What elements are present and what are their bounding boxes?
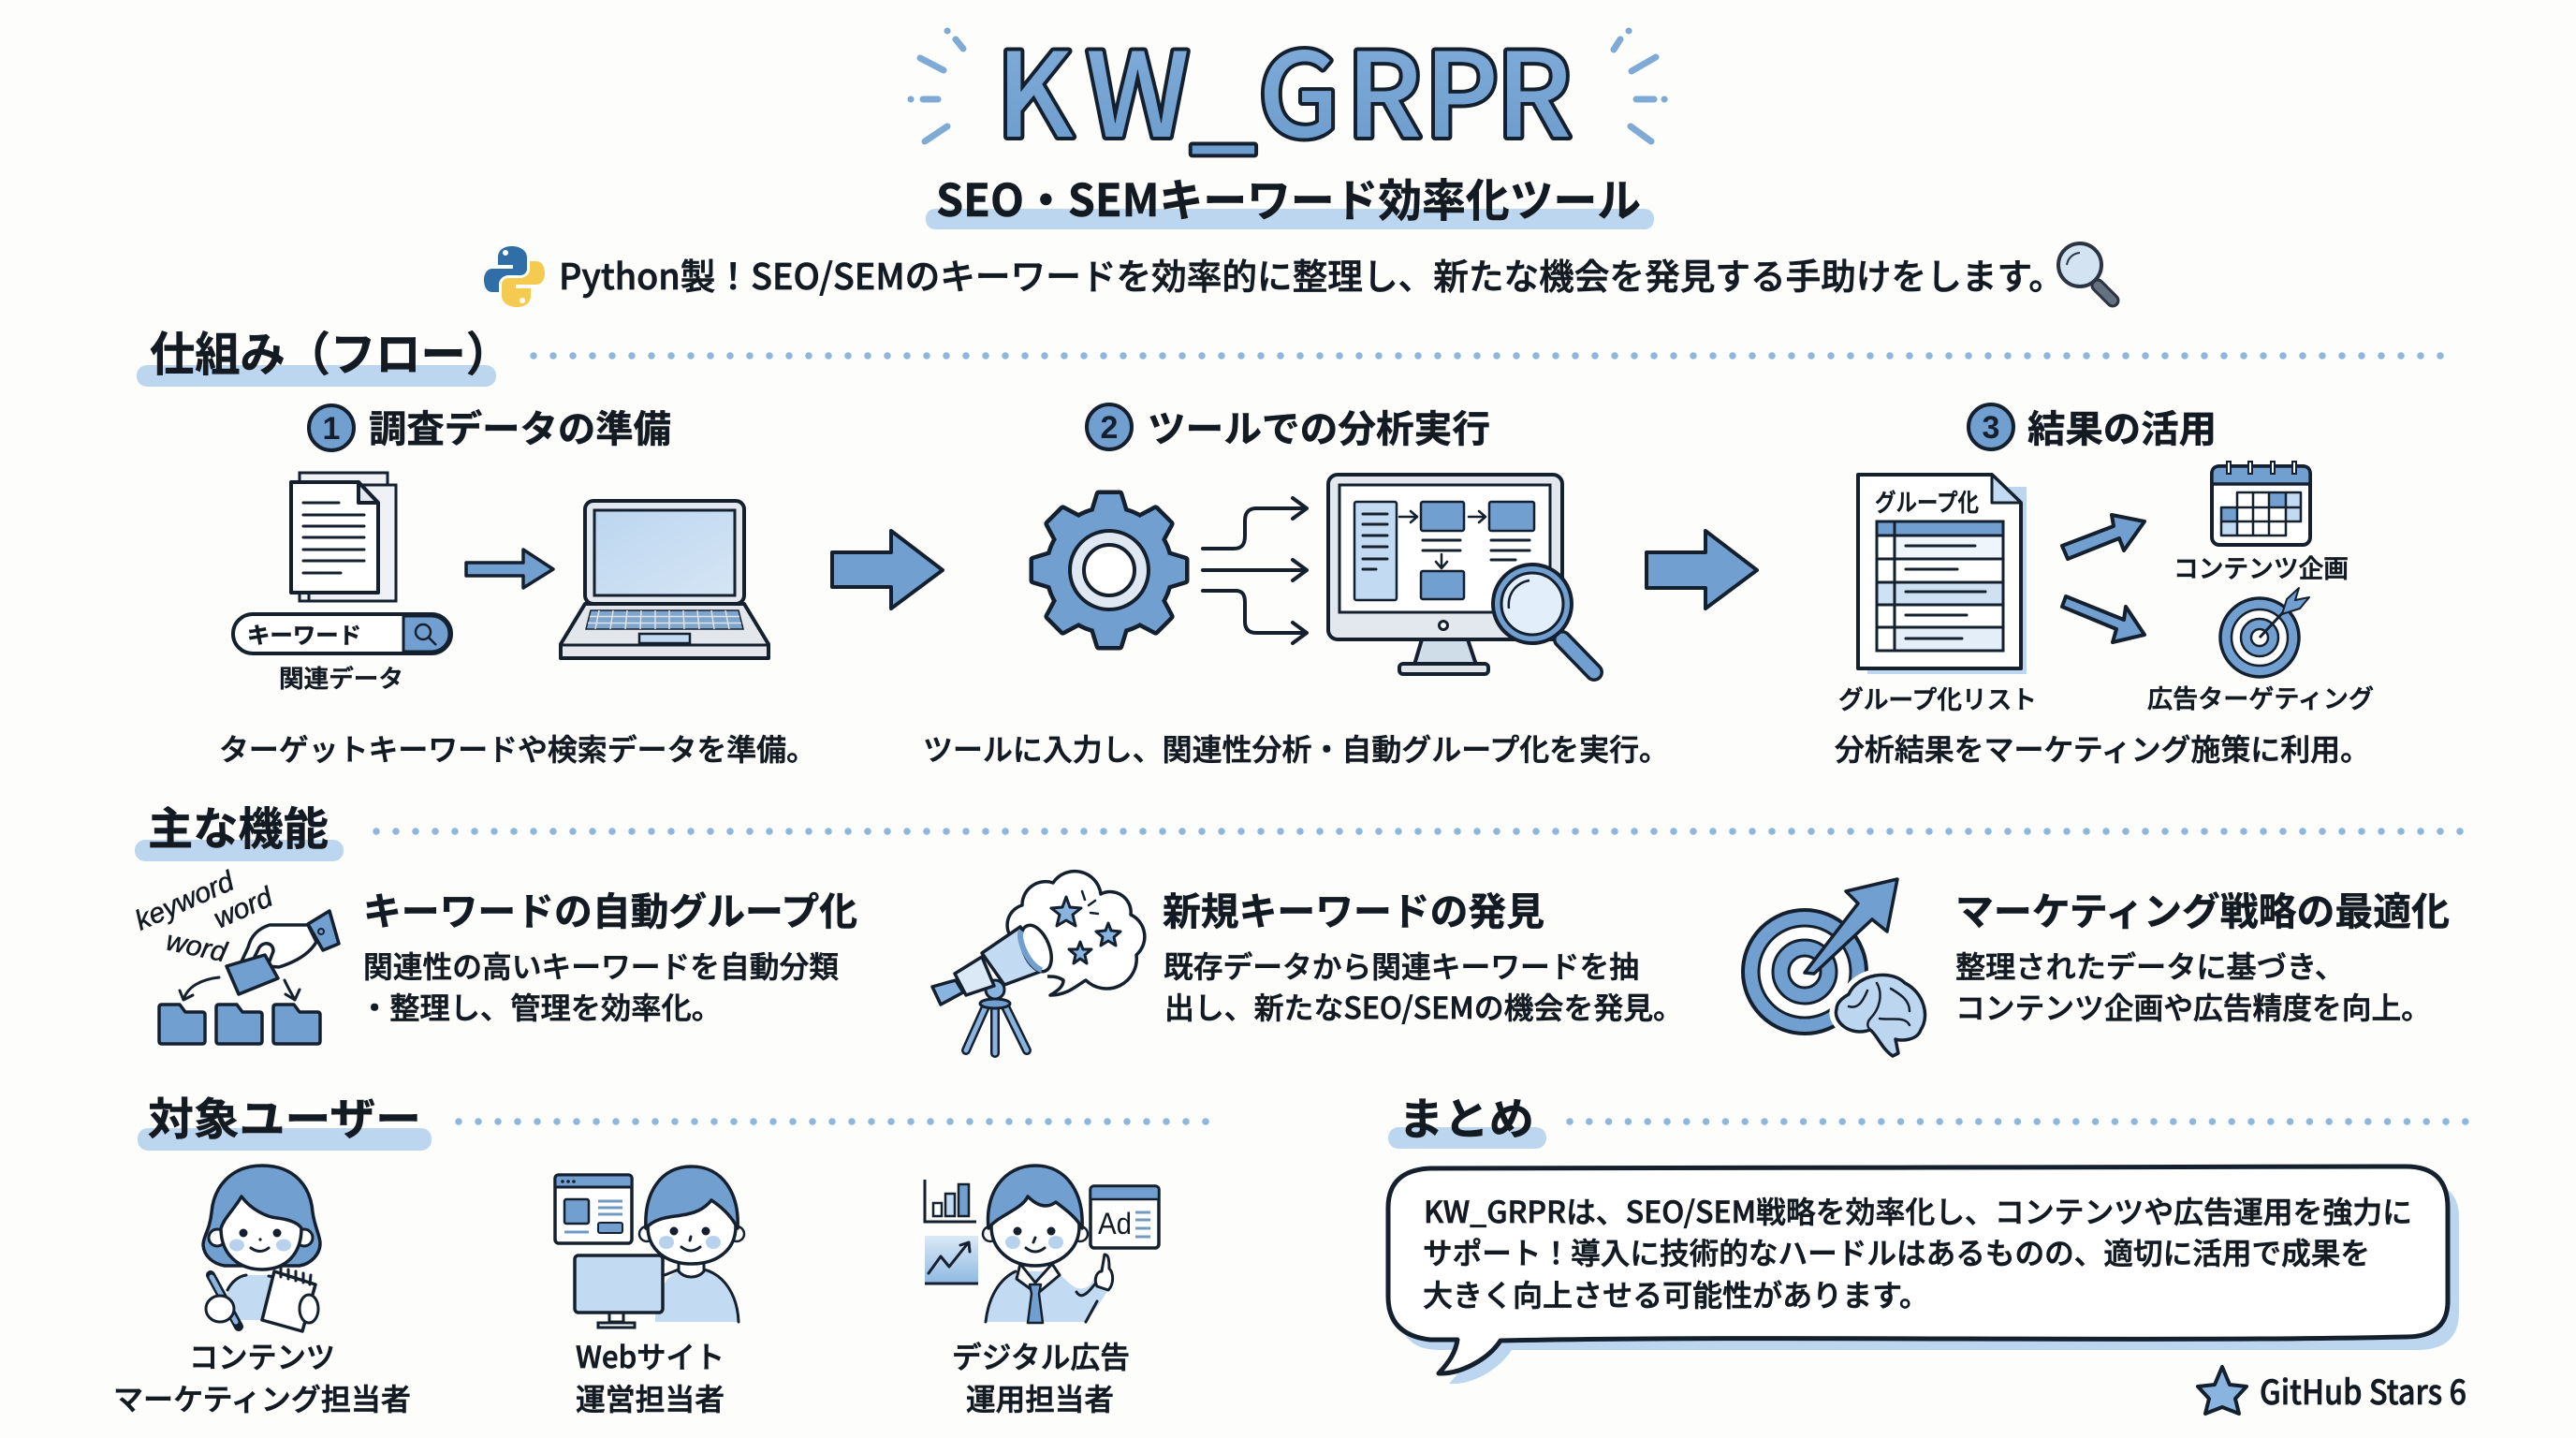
step 3 heading: 結果の活用 (2027, 399, 2217, 453)
illustration: man with charts and ad: Ad (1098, 1207, 1132, 1240)
heading: flow: 仕組み（フロー） (150, 317, 511, 385)
title: KW_GRPR (996, 2, 1572, 170)
speech bubble (1388, 1167, 2459, 1384)
step 1 heading: 調査データの準備 (369, 399, 671, 453)
feature 2 title: 新規キーワードの発見 (1163, 880, 1544, 936)
icon: grouped list: グループ化 (1875, 484, 1979, 519)
label: 運営担当者 (576, 1376, 724, 1419)
icon: laptop (561, 501, 768, 658)
icon: target with dart (2220, 588, 2309, 677)
label: デジタル広告 (952, 1334, 1130, 1377)
icon: hand sorting keywords into folders: word (164, 926, 230, 969)
feature 1 title: キーワードの自動グループ化 (363, 880, 857, 936)
icon: monitor with magnifier (1328, 475, 1594, 674)
icon: grouped list (1858, 475, 2027, 674)
feature 3 (1743, 879, 2450, 1056)
summary text: 大きく向上させる可能性があります。 (1423, 1272, 1929, 1315)
feature 3 description: コンテンツ企画や広告精度を向上。 (1955, 985, 2431, 1028)
illustration: woman with notepad (203, 1166, 320, 1331)
arrow: step 1 to 2 (832, 531, 943, 609)
panel: flow (137, 317, 2443, 770)
panel: summary (1388, 1083, 2471, 1415)
heading: target users (138, 1083, 1208, 1151)
icon: hand sorting keywords into folders: keyword (130, 865, 240, 936)
user: web manager (555, 1167, 744, 1419)
label: grouped list: グループ化リスト (1838, 680, 2037, 716)
feature 3 description: 整理されたデータに基づき、 (1955, 944, 2345, 987)
heading: summary: まとめ (1398, 1083, 1534, 1148)
search bar (233, 614, 451, 653)
label: related data: 関連データ (279, 660, 403, 695)
feature 1 description: 関連性の高いキーワードを自動分類 (363, 944, 839, 987)
feature 1 (130, 865, 857, 1044)
feature 2 description: 既存データから関連キーワードを抽 (1164, 944, 1639, 987)
label: ad targeting: 広告ターゲティング (2147, 679, 2374, 715)
feature 3 description (1955, 944, 2431, 1028)
arrow: to content planning (2062, 515, 2144, 559)
arrows: gear to monitor (1203, 498, 1307, 643)
arrow: small (466, 550, 553, 588)
feature 3 title: マーケティング戦略の最適化 (1955, 880, 2450, 936)
subtitle: SEO・SEMキーワード効率化ツール (936, 164, 1641, 229)
icon: python logo (484, 246, 545, 307)
icon: hand sorting keywords into folders (130, 865, 339, 1044)
label: Webサイト (576, 1334, 724, 1377)
heading: features: 主な機能 (148, 792, 329, 858)
step 3 heading: 3 (1983, 410, 1999, 446)
heading: summary (1388, 1083, 2471, 1149)
panel: features (130, 792, 2464, 1056)
label (576, 1334, 724, 1419)
caption 2: ツールに入力し、関連性分析・自動グループ化を実行。 (923, 726, 1669, 770)
label: マーケティング担当者 (113, 1376, 411, 1419)
feature 2 description: 出し、新たなSEO/SEMの機会を発見。 (1164, 985, 1683, 1028)
step 2 heading: ツールでの分析実行 (1148, 399, 1490, 453)
summary text: KW_GRPRは、SEO/SEM戦略を効率化し、コンテンツや広告運用を強力に (1424, 1189, 2412, 1232)
icon: hand sorting keywords into folders: word (209, 881, 278, 934)
summary text: サポート！導入に技術的なハードルはあるものの、適切に活用で成果を (1423, 1230, 2370, 1273)
label: content planning: コンテンツ企画 (2174, 549, 2349, 585)
heading: features (135, 792, 2464, 861)
caption 1: ターゲットキーワードや検索データを準備。 (219, 726, 816, 770)
label: コンテンツ (189, 1334, 335, 1377)
icon: telescope with stars (932, 872, 1145, 1053)
icon: calendar (2212, 462, 2310, 545)
illustration: man with browser and monitor (555, 1167, 744, 1328)
intro text: Python製！SEO/SEMのキーワードを効率的に整理し、新たな機会を発見する手助けをします。 (559, 248, 2064, 300)
github stars: GitHub Stars 6 (2260, 1366, 2466, 1415)
panel: target users (113, 1083, 1208, 1419)
feature 2 (932, 872, 1683, 1053)
icon: magnifier (2058, 243, 2113, 301)
illustration: man with charts and ad (925, 1166, 1159, 1323)
label: 運用担当者 (966, 1376, 1114, 1419)
arrow: step 2 to 3 (1647, 531, 1757, 609)
feature 1 description (359, 944, 839, 1028)
label (952, 1334, 1130, 1419)
label (113, 1334, 411, 1419)
step 2 heading: 2 (1101, 410, 1118, 446)
caption 3: 分析結果をマーケティング施策に利用。 (1835, 726, 2370, 770)
feature 1 description: ・整理し、管理を効率化。 (359, 985, 722, 1028)
heading: flow (137, 317, 2443, 387)
step 3 (1835, 399, 2374, 770)
icon: target, arrow and brain (1743, 879, 1925, 1056)
arrow: to ad targeting (2062, 596, 2144, 642)
step 2 (923, 399, 1669, 770)
heading: target users: 対象ユーザー (148, 1083, 421, 1148)
feature 2 description (1164, 944, 1683, 1028)
icon: documents (291, 473, 396, 601)
icon: gear (1033, 494, 1185, 646)
user: content marketer (113, 1166, 411, 1419)
summary text (1423, 1189, 2412, 1315)
user: ad manager (925, 1166, 1159, 1419)
search bar: キーワード (247, 617, 361, 650)
step 1 (219, 399, 816, 770)
step 1 heading: 1 (323, 411, 340, 447)
